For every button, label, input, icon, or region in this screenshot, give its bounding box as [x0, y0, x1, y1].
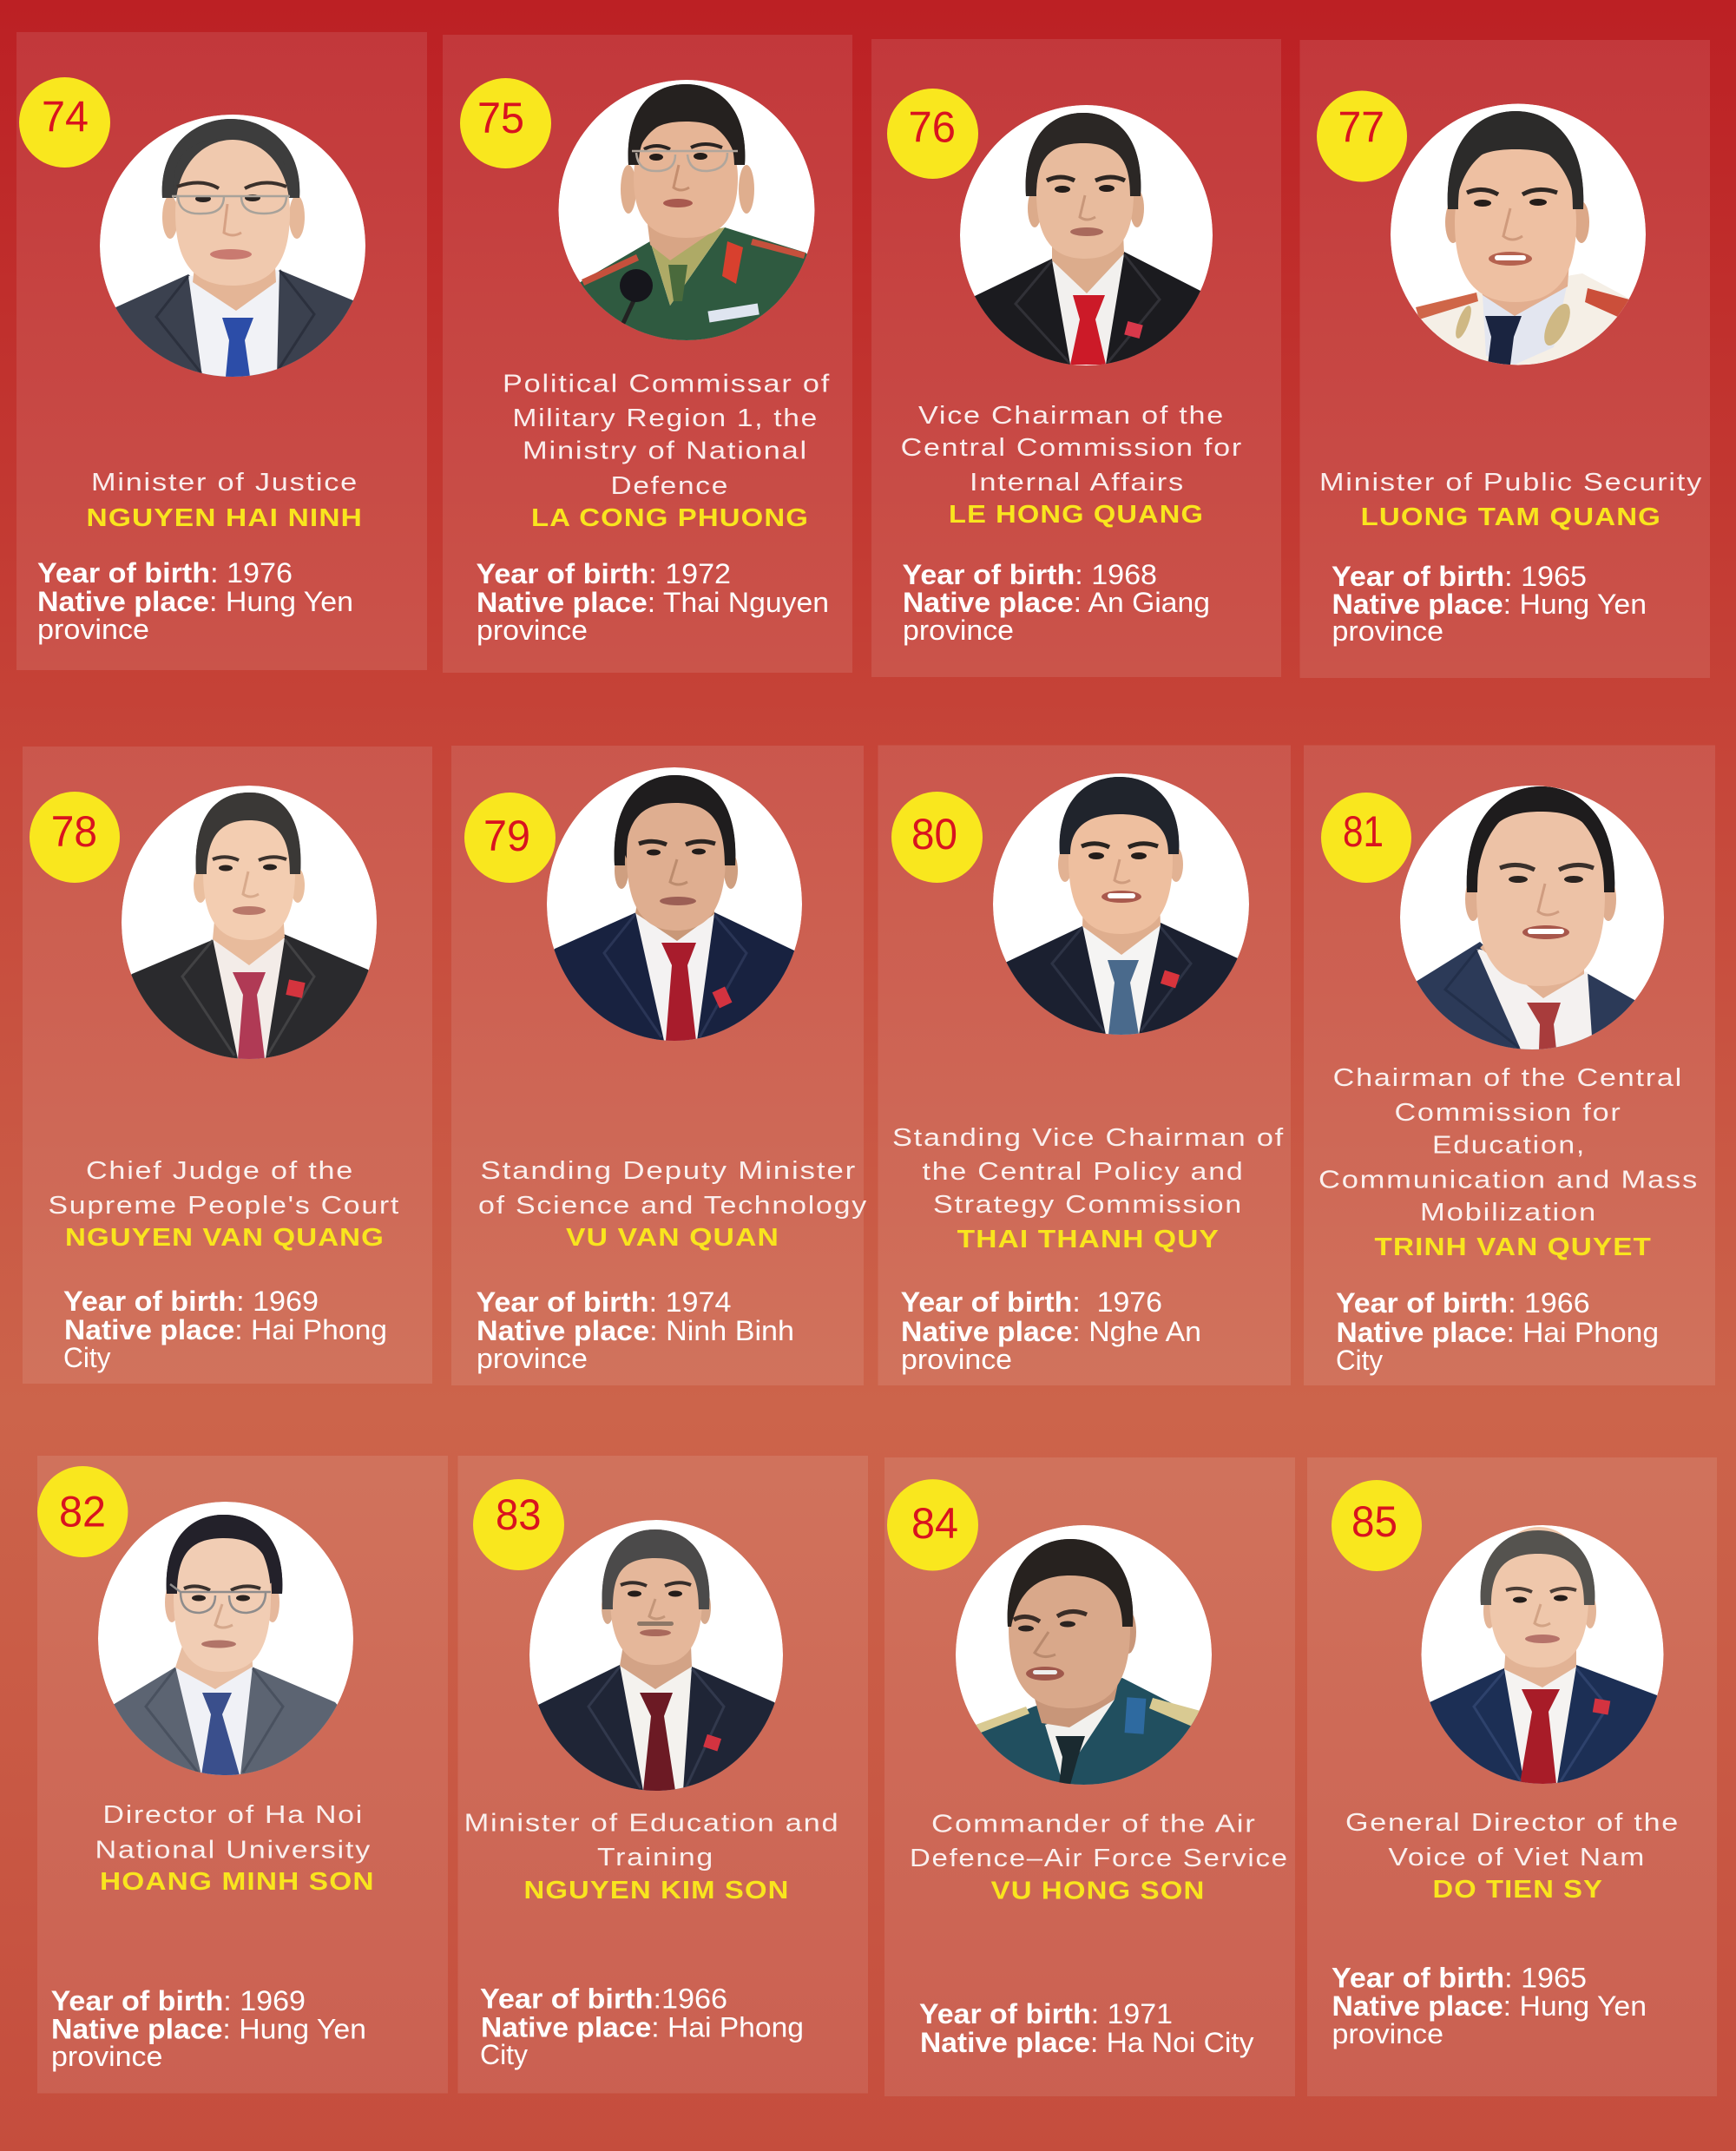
portrait: Nguyen Van Quang: [122, 786, 377, 1059]
details: Native place : Nghe An: [901, 1316, 1201, 1347]
role: Commander of the Air: [931, 1811, 1257, 1839]
details: Year of birth : 1965: [1332, 1963, 1587, 1994]
details: Year of birth : 1971: [919, 1998, 1173, 2029]
details: [51, 1985, 366, 2072]
details: Year of birth : 1974: [476, 1286, 731, 1318]
details: [476, 558, 829, 646]
details: [903, 559, 1210, 646]
badge: 85: 85: [1351, 1497, 1397, 1546]
badge: 82: 82: [59, 1488, 106, 1536]
details: Year of birth : 1976: [901, 1286, 1162, 1318]
panel: card 79 Vu Van Quan: [451, 746, 868, 1385]
role: Standing Vice Chairman of: [892, 1124, 1285, 1152]
role: Defence: [611, 472, 729, 500]
badge: 77: 77: [1338, 103, 1384, 152]
portrait: Le Hong Quang: [960, 105, 1213, 365]
details: City: [480, 2039, 528, 2070]
role: the Central Policy and: [922, 1158, 1245, 1186]
details: province: [1332, 615, 1443, 647]
role: Standing Deputy Minister: [481, 1157, 857, 1185]
details: Year of birth : 1968: [903, 559, 1157, 590]
role: Chairman of the Central: [1333, 1064, 1683, 1092]
details: province: [51, 2041, 162, 2072]
badge: 76: 76: [908, 103, 956, 152]
details: Native place : Ha Noi City: [920, 2027, 1253, 2058]
badge: 84: [887, 1479, 978, 1571]
badge: 78: [30, 792, 120, 883]
role: Strategy Commission: [933, 1191, 1243, 1219]
role: Mobilization: [1420, 1199, 1597, 1227]
role: [910, 1811, 1289, 1872]
portrait: Vu Hong Son: [956, 1525, 1212, 1785]
panel: card 80 Thai Thanh Quy: [878, 745, 1291, 1385]
badge: 85: [1332, 1480, 1422, 1571]
details: Native place : Hai Phong: [1337, 1317, 1659, 1348]
details: Year of birth : 1976: [37, 557, 293, 589]
details: Year of birth : 1969: [63, 1286, 319, 1317]
details: [1336, 1287, 1659, 1376]
role: Education,: [1432, 1132, 1586, 1160]
details: Native place : Hai Phong: [64, 1314, 387, 1345]
panel: card 85 Do Tien Sy: [1307, 1457, 1717, 2096]
details: province: [37, 614, 149, 645]
badge: 78: 78: [51, 807, 97, 856]
name: THAI THANH QUY: [957, 1226, 1220, 1253]
name: NGUYEN HAI NINH: [87, 504, 363, 532]
badge: 79: [464, 793, 556, 883]
panel: card 76 Le Hong Quang: [871, 39, 1281, 677]
details: Native place : Hung Yen: [1332, 1990, 1647, 2022]
badge: 75: 75: [477, 94, 524, 142]
panel: card 78 Nguyen Van Quang: [23, 747, 432, 1384]
details: Native place : Ninh Binh: [477, 1315, 794, 1346]
details: [1332, 1963, 1647, 2049]
role: Internal Affairs: [970, 469, 1185, 497]
role: [49, 1157, 400, 1220]
role: General Director of the: [1345, 1809, 1680, 1837]
role: Communication and Mass: [1318, 1167, 1699, 1194]
details: Native place : Hung Yen: [37, 586, 353, 617]
portrait: Luong Tam Quang: [1391, 104, 1646, 365]
portrait: Nguyen Hai Ninh: [100, 115, 365, 377]
portrait: Hoang Minh Son: [98, 1502, 353, 1775]
portrait: Trinh Van Quyet: [1400, 786, 1664, 1049]
details: City: [63, 1342, 111, 1373]
panel: card 82 Hoang Minh Son: [37, 1456, 448, 2094]
panel: card 77 Luong Tam Quang: [1300, 40, 1710, 678]
role: [478, 1157, 868, 1220]
badge: 82: [37, 1466, 128, 1557]
details: province: [477, 615, 588, 646]
badge: 83: 83: [496, 1490, 542, 1539]
details: [37, 557, 353, 645]
name: VU HONG SON: [991, 1878, 1205, 1905]
name: NGUYEN VAN QUANG: [65, 1224, 385, 1252]
details: [1332, 561, 1647, 647]
role: Training: [597, 1844, 714, 1871]
name: TRINH VAN QUYET: [1375, 1233, 1652, 1261]
role: Central Commission for: [901, 434, 1243, 462]
role: Political Commissar of: [503, 370, 831, 398]
role: Military Region 1, the: [512, 405, 819, 432]
role: Minister of Justice: [91, 469, 358, 497]
details: Native place : Thai Nguyen: [477, 587, 829, 618]
details: [919, 1998, 1253, 2058]
badge: 74: 74: [42, 92, 89, 141]
badge: 83: [473, 1479, 564, 1570]
details: Year of birth : 1972: [476, 558, 731, 589]
details: Year of birth : 1966: [1336, 1287, 1590, 1319]
badge: 77: [1317, 90, 1407, 182]
role: Chief Judge of the: [86, 1157, 354, 1185]
role: Minister of Education and: [464, 1809, 840, 1837]
details: City: [1336, 1345, 1383, 1376]
role: [1345, 1809, 1680, 1871]
role: [95, 1801, 372, 1865]
role: Ministry of National: [523, 437, 808, 465]
badge: 76: [887, 89, 978, 179]
role: [901, 402, 1243, 497]
details: Native place : Hung Yen: [51, 2014, 366, 2045]
details: province: [901, 1344, 1012, 1375]
role: [1318, 1064, 1699, 1227]
portrait: Nguyen Kim Son: [529, 1520, 783, 1791]
role: Minister of Public Security: [1319, 469, 1703, 497]
name: NGUYEN KIM SON: [524, 1877, 790, 1904]
panel: card 84 Vu Hong Son: [884, 1457, 1295, 2096]
name: LE HONG QUANG: [949, 501, 1204, 529]
badge: 79: 79: [483, 812, 530, 860]
name: LA CONG PHUONG: [531, 504, 809, 532]
details: province: [1332, 2018, 1443, 2049]
portrait: Vu Van Quan: [547, 767, 802, 1041]
details: Native place : Hai Phong: [481, 2012, 804, 2043]
role: Supreme People's Court: [49, 1192, 400, 1220]
details: [476, 1286, 794, 1374]
details: Native place : An Giang: [903, 587, 1210, 618]
badge: 81: [1321, 793, 1411, 883]
details: [901, 1286, 1201, 1375]
name: HOANG MINH SON: [100, 1868, 375, 1896]
role: Vice Chairman of the: [918, 402, 1225, 430]
role: [503, 370, 831, 500]
badge: 80: 80: [911, 810, 957, 858]
portrait: Thai Thanh Quy: [993, 773, 1249, 1035]
role: [464, 1809, 840, 1871]
details: province: [903, 615, 1014, 646]
details: [63, 1286, 387, 1373]
name: LUONG TAM QUANG: [1361, 503, 1661, 531]
name: VU VAN QUAN: [566, 1224, 779, 1252]
role: [892, 1124, 1285, 1219]
panel: card 81 Trinh Van Quyet: [1304, 745, 1715, 1385]
role: Voice of Viet Nam: [1389, 1844, 1646, 1871]
role: National University: [95, 1837, 372, 1865]
details: Year of birth :1966: [480, 1983, 727, 2014]
portrait: La Cong Phuong: [559, 80, 814, 340]
details: Native place : Hung Yen: [1332, 589, 1647, 620]
badge: 81: 81: [1343, 807, 1384, 856]
role: Commission for: [1394, 1099, 1621, 1127]
name: DO TIEN SY: [1432, 1876, 1603, 1904]
badge: 74: [19, 77, 110, 168]
role: of Science and Technology: [478, 1192, 868, 1220]
badge: 75: [460, 78, 551, 168]
badge: 80: [891, 792, 983, 883]
panel: card 83 Nguyen Kim Son: [458, 1456, 868, 2094]
badge: 84: 84: [911, 1499, 958, 1548]
panel: card 74 Nguyen Hai Ninh: [16, 32, 427, 670]
details: [480, 1983, 804, 2070]
role: Defence–Air Force Service: [910, 1845, 1289, 1872]
details: Year of birth : 1969: [51, 1985, 306, 2016]
panel: card 75 La Cong Phuong: [443, 35, 852, 673]
details: province: [477, 1343, 588, 1374]
portrait: Do Tien Sy: [1422, 1525, 1663, 1784]
role: Director of Ha Noi: [102, 1801, 364, 1829]
details: Year of birth : 1965: [1332, 561, 1587, 592]
